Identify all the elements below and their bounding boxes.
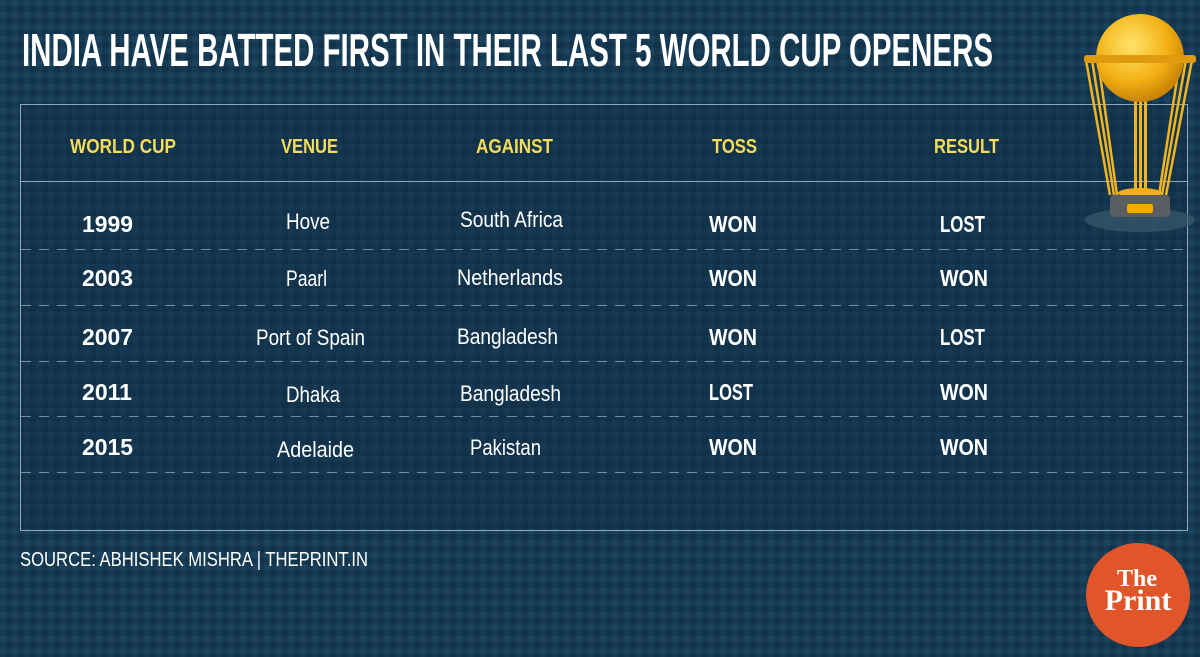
toss: LOST — [709, 379, 753, 405]
table panel — [20, 104, 1188, 530]
years: 2011 — [82, 379, 132, 405]
result: WON — [940, 434, 988, 460]
result — [940, 211, 988, 460]
result: WON — [940, 265, 988, 291]
result: LOST — [940, 211, 985, 237]
logo: ThePrint: The — [1117, 566, 1157, 592]
years: 2003 — [82, 265, 133, 291]
venues: Adelaide — [277, 437, 354, 462]
result: LOST — [940, 324, 985, 350]
header row — [70, 136, 999, 158]
years: 2015 — [82, 434, 133, 460]
against: Bangladesh — [460, 381, 561, 406]
years: 1999 — [82, 211, 133, 237]
source text: SOURCE: ABHISHEK MISHRA | THEPRINT.IN — [20, 549, 368, 571]
toss: WON — [709, 265, 757, 291]
header row: TOSS — [712, 136, 757, 158]
against: Netherlands — [457, 265, 563, 290]
result: WON — [940, 379, 988, 405]
icon: trophy — [1084, 14, 1196, 232]
against: Bangladesh — [457, 324, 558, 349]
toss: WON — [709, 434, 757, 460]
header row: AGAINST — [476, 136, 553, 158]
against: Pakistan — [470, 435, 541, 460]
venues — [256, 209, 365, 462]
years: 2007 — [82, 324, 133, 350]
toss: WON — [709, 211, 757, 237]
against — [457, 207, 564, 460]
logo: ThePrint — [1086, 543, 1190, 647]
toss: WON — [709, 324, 757, 350]
years — [82, 211, 133, 460]
venues: Paarl — [286, 266, 327, 291]
logo: ThePrint: Print — [1105, 584, 1171, 617]
venues: Dhaka — [286, 382, 341, 407]
against: South Africa — [460, 207, 564, 232]
header row: RESULT — [934, 136, 999, 158]
venues: Port of Spain — [256, 325, 365, 350]
venues: Hove — [286, 209, 330, 234]
header row: VENUE — [281, 136, 338, 158]
toss — [709, 211, 757, 460]
header row: WORLD CUP — [70, 136, 176, 158]
